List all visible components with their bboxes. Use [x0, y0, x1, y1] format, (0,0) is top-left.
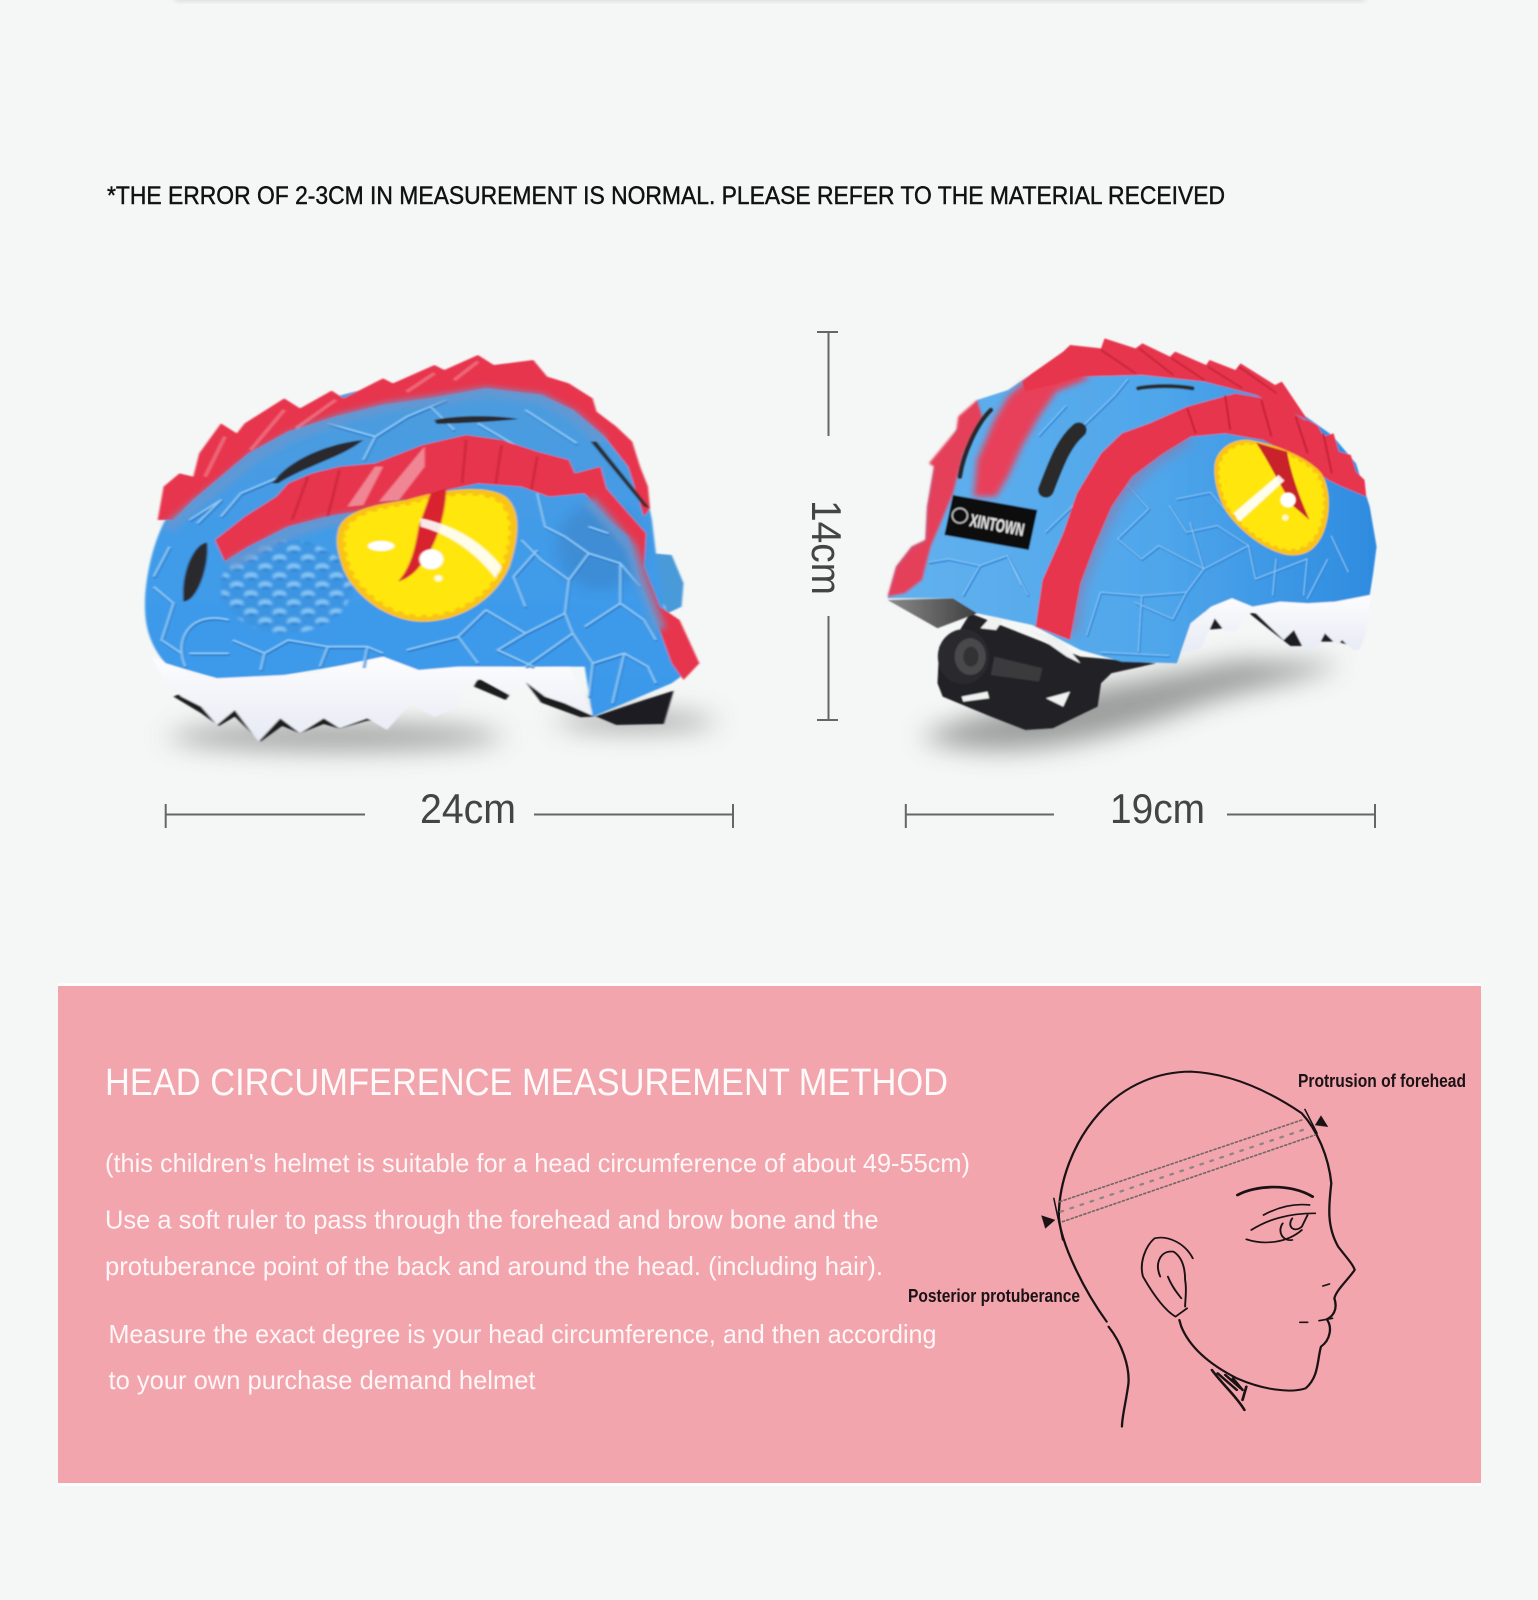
crest highlights — [205, 362, 478, 477]
helmet: rear three-quarter view — [888, 338, 1377, 750]
purchase guidance — [108, 1319, 936, 1395]
forehead arrow — [1315, 1116, 1328, 1127]
rear black padding — [577, 691, 674, 725]
helmet shadow — [919, 660, 1342, 750]
vents — [183, 416, 650, 602]
back of head and neck — [1059, 1217, 1129, 1427]
ear — [1142, 1238, 1193, 1317]
panel background — [58, 983, 1481, 1486]
ruler instructions: Use a soft ruler to pass through the forehead and brow bone and the — [105, 1204, 878, 1234]
crest fade into blue — [168, 392, 603, 528]
helmet shadow — [170, 712, 715, 751]
adjuster mechanism — [937, 613, 1156, 730]
band scale marks — [1061, 1128, 1308, 1212]
panel: head circumference measurement — [58, 983, 1481, 1486]
black lining between teeth — [173, 678, 595, 742]
rear shading — [557, 503, 644, 590]
panel heading: HEAD CIRCUMFERENCE MEASUREMENT METHOD — [105, 1062, 948, 1104]
brow highlights — [347, 447, 425, 507]
forehead marker — [1305, 1109, 1317, 1133]
black lining between teeth — [1204, 610, 1358, 646]
head diagram — [1042, 1072, 1355, 1427]
back marker — [1054, 1198, 1063, 1240]
head profile — [1059, 1072, 1355, 1391]
helmet shell — [145, 375, 699, 717]
vents — [960, 386, 1192, 490]
logo badge — [944, 495, 1037, 550]
stripe soft underlay — [1067, 433, 1187, 633]
snout scales — [221, 540, 351, 633]
ruler instructions: protuberance point of the back and around the head. (including hair). — [105, 1251, 883, 1281]
measurement note: *THE ERROR OF 2-3CM IN MEASUREMENT IS NORMAL. PLEASE REFER TO THE MATERIAL RECEIVED — [107, 182, 1225, 210]
height dimension: 14cm — [803, 332, 850, 720]
centre crest stripe — [974, 367, 1089, 497]
top crest — [1022, 338, 1308, 420]
helmet body — [888, 338, 1377, 730]
width dimension: 24cm — [166, 785, 733, 832]
back arrow — [1042, 1216, 1055, 1228]
brow ridge — [215, 435, 699, 680]
brow crest stripe — [1036, 393, 1366, 640]
white teeth — [152, 657, 595, 742]
brow fade into blue — [229, 500, 660, 630]
left crest stripe — [888, 400, 982, 597]
under-jaw shading — [1212, 1370, 1246, 1410]
width label: 24cm — [420, 785, 516, 832]
width dimension: 19cm — [906, 785, 1375, 832]
shell cracks — [154, 400, 657, 705]
logo badge: XINTOWN — [968, 510, 1026, 540]
brow ridge marks — [292, 440, 537, 520]
eye — [337, 488, 517, 622]
underside wedge — [888, 598, 977, 628]
helmet body — [145, 355, 699, 742]
brow ridge marks — [1187, 395, 1332, 473]
top edge shadow — [175, 0, 1365, 1]
posterior label: Posterior protuberance — [908, 1286, 1080, 1306]
purchase guidance: to your own purchase demand helmet — [108, 1365, 536, 1395]
width label: 19cm — [1110, 785, 1205, 832]
eyebrow — [1238, 1187, 1313, 1197]
nose and mouth — [1300, 1284, 1332, 1322]
rear adjuster bump — [652, 553, 684, 613]
helmet: side view — [145, 355, 715, 751]
height label: 14cm — [803, 500, 850, 595]
shell cracks — [928, 379, 1349, 657]
eye — [1246, 1205, 1315, 1242]
top crest — [158, 355, 650, 520]
eye — [1214, 440, 1329, 555]
helmet shell — [888, 360, 1377, 663]
purchase guidance: Measure the exact degree is your head circumference, and then according — [108, 1319, 936, 1349]
suitability note: (this children's helmet is suitable for a head circumference of about 49-55cm) — [105, 1148, 970, 1178]
white teeth — [1180, 595, 1370, 653]
measuring band — [1060, 1120, 1315, 1222]
top crest ridge marks — [1101, 348, 1277, 393]
forehead label: Protrusion of forehead — [1298, 1071, 1466, 1091]
ruler instructions — [105, 1204, 883, 1281]
